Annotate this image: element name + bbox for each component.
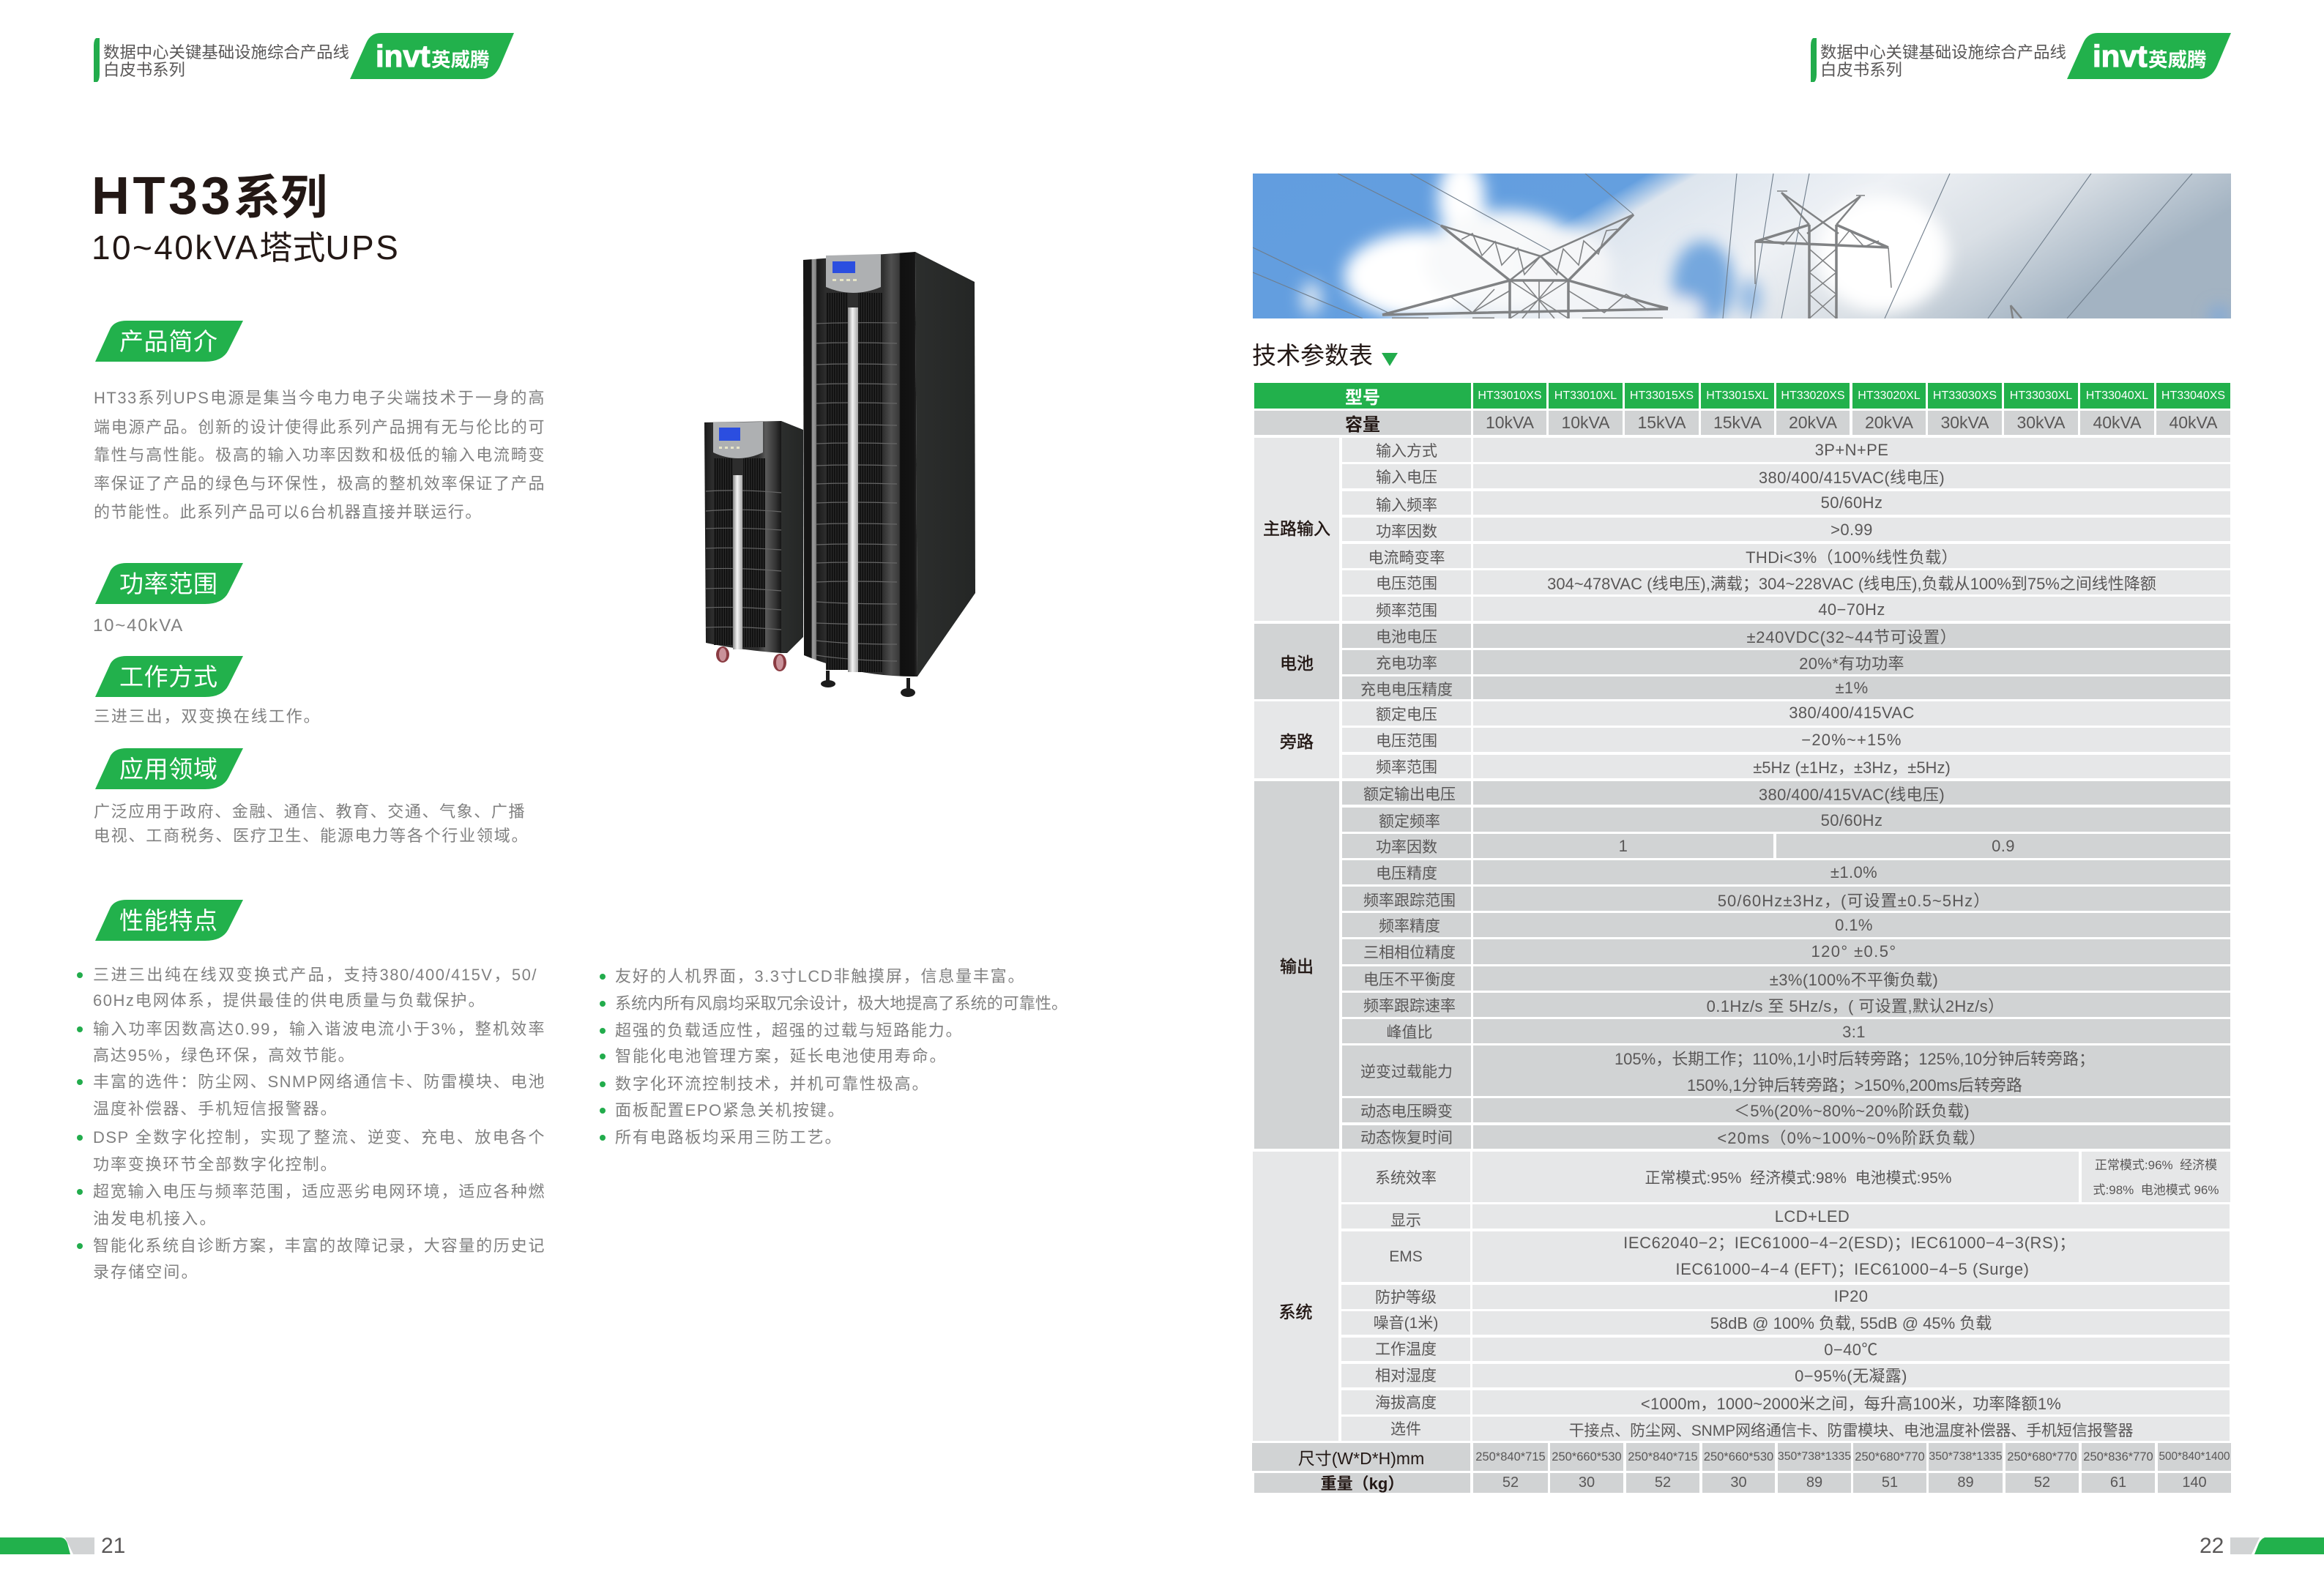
feature item: 数字化环流控制技术，并机可靠性极高。 xyxy=(615,1075,929,1093)
table row: weight: 重量（kg） xyxy=(1321,1475,1404,1492)
row: voltage range xyxy=(1342,570,2230,594)
table section: bypass xyxy=(1254,701,2230,778)
row: power factor: 0.9 xyxy=(1992,836,2015,855)
row: altitude: 海拔高度 xyxy=(1375,1394,1437,1412)
table row: model: HT33040XL xyxy=(2086,389,2148,401)
row: input voltage xyxy=(1342,464,2230,488)
row: dynamic voltage transient: ＜5%(20%~80%~20%阶跃负载) xyxy=(1734,1101,1970,1120)
badge: 工作方式: 工作方式 xyxy=(119,663,217,690)
text: application fields: 电视、工商税务、医疗卫生、能源电力等各个行业领域。 xyxy=(94,827,529,845)
badge: 性能特点 xyxy=(95,900,243,941)
row: protection class xyxy=(1341,1285,2230,1309)
row: altitude: <1000m，1000~2000米之间，每升高100米，功率降额1% xyxy=(1641,1394,2061,1413)
row: voltage accuracy: 电压精度 xyxy=(1376,865,1437,881)
row: display xyxy=(1341,1204,2230,1229)
row: charge power xyxy=(1342,650,2230,674)
power lines xyxy=(1253,174,2192,318)
table row: capacity: 40kVA xyxy=(2093,413,2142,432)
feature item: 超强的负载适应性，超强的过载与短路能力。 xyxy=(615,1021,963,1040)
table row: dimensions: 250*660*530 xyxy=(1704,1450,1773,1463)
row: rated voltage: 380/400/415VAC xyxy=(1789,703,1915,722)
row: voltage accuracy xyxy=(1342,860,2230,884)
table row: model: HT33020XL xyxy=(1858,389,1921,401)
row: frequency range: 频率范围 xyxy=(1376,759,1437,776)
logo: invt: invt xyxy=(376,39,431,73)
table row: weight: 52 xyxy=(1655,1475,1671,1491)
feature item: 丰富的选件：防尘网、SNMP网络通信卡、防雷模块、电池 xyxy=(93,1073,545,1091)
row: voltage unbalance: ±3%(100%不平衡负载) xyxy=(1770,971,1938,988)
badge: 功率范围 xyxy=(95,563,243,604)
table row: dimensions xyxy=(1252,1443,2231,1471)
badge: 性能特点: 性能特点 xyxy=(119,907,217,934)
row: noise: 58dB @ 100% 负载, 55dB @ 45% 负载 xyxy=(1710,1314,1992,1332)
row: EMS: EMS xyxy=(1389,1248,1423,1265)
table row: dimensions: 350*738*1335 xyxy=(1778,1450,1851,1463)
table row: weight: 52 xyxy=(1502,1475,1519,1491)
row: EMS xyxy=(1341,1231,2230,1282)
row: voltage unbalance xyxy=(1342,966,2230,991)
feature item: 面板配置EPO紧急关机按键。 xyxy=(615,1101,845,1119)
table row: capacity: 10kVA xyxy=(1561,413,1610,432)
row: battery voltage: ±240VDC(32~44节可设置） xyxy=(1747,628,1956,646)
row: options: 干接点、防尘网、SNMP网络通信卡、防雷模块、电池温度补偿器、手机短信报警器 xyxy=(1569,1422,2133,1439)
text block: product intro: HT33系列UPS电源是集当今电力电子尖端技术于一身的高 xyxy=(94,389,545,407)
row: current distortion: 电流畸变率 xyxy=(1368,549,1445,567)
row: voltage range: 304~478VAC (线电压),满载；304~228VAC (线电压),负载从100%到75%之间线性降额 xyxy=(1547,574,2156,593)
row: inverter overload: 105%，长期工作；110%,1小时后转旁路；125%,10分钟后转旁路； xyxy=(1614,1050,2095,1068)
table row: weight: 61 xyxy=(2110,1475,2126,1491)
feature item: 智能化系统自诊断方案，丰富的故障记录，大容量的历史记 xyxy=(93,1237,545,1255)
row: power factor: 功率因数 xyxy=(1376,839,1437,855)
feature list: left column xyxy=(77,966,545,1281)
row: voltage unbalance: 电压不平衡度 xyxy=(1363,971,1456,988)
row: frequency range: 40−70Hz xyxy=(1818,600,1885,618)
table row: capacity: 15kVA xyxy=(1713,413,1762,432)
table row: weight: 52 xyxy=(2034,1475,2050,1491)
header text: 白皮书系列 xyxy=(1820,61,1902,79)
tower left xyxy=(1382,215,1668,318)
table row: capacity: 15kVA xyxy=(1637,413,1686,432)
row: inverter overload xyxy=(1342,1045,2230,1096)
header text xyxy=(103,43,349,79)
row: dynamic voltage transient: 动态电压瞬变 xyxy=(1360,1103,1453,1120)
table section: system xyxy=(1253,1152,2230,1441)
heading: technical parameters: 技术参数表 xyxy=(1252,342,1373,369)
row: frequency tracking range: 频率跟踪范围 xyxy=(1363,892,1456,909)
row: relative humidity: 相对湿度 xyxy=(1375,1368,1437,1384)
feature item: 输入功率因数高达0.99，输入谐波电流小于3%，整机效率 xyxy=(93,1020,545,1038)
row: current distortion: THDi<3%（100%线性负载） xyxy=(1746,548,1958,567)
row: current distortion xyxy=(1342,544,2230,568)
table row: dimensions: 250*660*530 xyxy=(1552,1450,1622,1463)
row: input voltage: 输入电压 xyxy=(1376,469,1437,486)
text: application fields: 广泛应用于政府、金融、通信、教育、交通、气象、广播 xyxy=(94,802,526,821)
row: crest ratio: 峰值比 xyxy=(1387,1024,1432,1041)
row: EMS: IEC61000−4−4 (EFT)；IEC61000−4−5 (Surge) xyxy=(1675,1260,2030,1278)
row: frequency range: 频率范围 xyxy=(1376,602,1437,619)
page header left xyxy=(94,33,514,82)
logo: invt: invt xyxy=(2093,39,2148,73)
table row: weight xyxy=(1252,1473,2231,1493)
row: working temperature: 0−40℃ xyxy=(1824,1341,1878,1359)
feature list: right column xyxy=(600,967,1068,1147)
row: voltage range xyxy=(1342,728,2230,752)
text block: product intro: 靠性与高性能。极高的输入功率因数和极低的输入电流畸变 xyxy=(94,446,545,464)
row: power factor: 1 xyxy=(1619,836,1628,855)
row: noise xyxy=(1341,1311,2230,1335)
feature item: 录存储空间。 xyxy=(93,1263,198,1281)
logo: invt: 英威腾 xyxy=(431,49,489,71)
footer right: page 22: 22 xyxy=(2200,1534,2224,1558)
table row: weight: 89 xyxy=(1806,1475,1822,1491)
wheels xyxy=(716,646,786,671)
icon: green down triangle xyxy=(1382,353,1398,366)
row: system efficiency: 式:98% 电池模式 96% xyxy=(2093,1183,2219,1197)
feature item: 高达95%，绿色环保，高效节能。 xyxy=(93,1046,355,1065)
table row: dimensions: 250*840*715 xyxy=(1628,1450,1698,1463)
row: input voltage: 380/400/415VAC(线电压) xyxy=(1759,469,1945,486)
table section: battery xyxy=(1254,624,2230,699)
table section: main input: 主路输入 xyxy=(1263,518,1330,537)
table row: model: HT33015XS xyxy=(1630,389,1694,401)
row: dynamic voltage transient xyxy=(1342,1098,2230,1122)
row: input mode: 输入方式 xyxy=(1376,442,1437,460)
row: charge power: 充电功率 xyxy=(1376,655,1437,672)
table row: dimensions: 250*840*715 xyxy=(1475,1450,1546,1463)
table row: capacity: 10kVA xyxy=(1486,413,1534,432)
row: rated frequency xyxy=(1342,808,2230,832)
row: frequency tracking range xyxy=(1342,887,2230,911)
feature item xyxy=(77,1020,545,1065)
row: charge voltage accuracy xyxy=(1342,676,2230,699)
large cabinet xyxy=(803,252,975,697)
table row: model: HT33015XL xyxy=(1706,389,1769,401)
table row: capacity: 30kVA xyxy=(2016,413,2066,432)
table row: weight: 89 xyxy=(1957,1475,1974,1491)
row: working temperature xyxy=(1341,1338,2230,1361)
footer left: page 21: 21 xyxy=(101,1534,125,1558)
row: display: 显示 xyxy=(1390,1212,1421,1229)
feature item: 油发电机接入。 xyxy=(93,1209,217,1228)
row: power factor: >0.99 xyxy=(1830,521,1873,539)
row: rated output voltage: 380/400/415VAC(线电压) xyxy=(1759,786,1945,804)
badge: 应用领域: 应用领域 xyxy=(119,756,217,783)
table row: dimensions: 350*738*1335 xyxy=(1929,1450,2003,1463)
text block: product intro: 端电源产品。创新的设计使得此系列产品拥有无与伦比的可 xyxy=(94,418,545,436)
small cabinet xyxy=(704,421,803,671)
row: power factor xyxy=(1342,518,2230,541)
badge: 应用领域 xyxy=(95,748,243,789)
row: input frequency: 50/60Hz xyxy=(1821,493,1882,512)
row: rated voltage xyxy=(1342,701,2230,726)
feature item: 智能化电池管理方案，延长电池使用寿命。 xyxy=(615,1047,947,1065)
row: options: 选件 xyxy=(1390,1420,1421,1438)
feet xyxy=(821,671,915,697)
row: battery voltage: 电池电压 xyxy=(1376,628,1437,646)
row: system efficiency xyxy=(1341,1152,2230,1202)
row: noise: 噪音(1米) xyxy=(1374,1315,1438,1332)
logo: invt xyxy=(2067,33,2231,79)
logo: invt: 英威腾 xyxy=(2148,49,2207,71)
table row: model: HT33040XS xyxy=(2161,389,2225,401)
tower middle xyxy=(1755,191,1891,318)
feature item: 60Hz电网体系，提供最佳的供电质量与负载保护。 xyxy=(93,991,485,1010)
table row: dimensions: 250*836*770 xyxy=(2083,1450,2153,1463)
feature item: 友好的人机界面，3.3寸LCD非触摸屏，信息量丰富。 xyxy=(615,967,1025,985)
row: EMS: IEC62040−2；IEC61000−4−2(ESD)；IEC61000−4−3(RS)； xyxy=(1623,1234,2076,1252)
table row: model xyxy=(1254,383,2230,409)
text block: product intro: 率保证了产品的绿色与环保性，极高的整机效率保证了产品 xyxy=(94,474,545,493)
row: frequency range xyxy=(1342,597,2230,621)
table row: capacity: 40kVA xyxy=(2169,413,2218,432)
row: relative humidity: 0−95%(无凝露) xyxy=(1795,1367,1907,1385)
header text: 数据中心关键基础设施综合产品线 xyxy=(1820,43,2066,61)
row: power factor xyxy=(1342,834,2230,858)
row: frequency range: ±5Hz (±1Hz，±3Hz，±5Hz) xyxy=(1753,758,1951,777)
badge: 产品简介: 产品简介 xyxy=(119,328,217,355)
row: crest ratio: 3:1 xyxy=(1842,1022,1866,1041)
row: rated voltage: 额定电压 xyxy=(1376,706,1437,723)
header text: 数据中心关键基础设施综合产品线 xyxy=(103,43,349,61)
row: options xyxy=(1341,1417,2230,1441)
text: power range: 10~40kVA xyxy=(93,616,184,635)
row: three phase accuracy xyxy=(1342,939,2230,964)
feature item xyxy=(77,1073,545,1118)
subtitle: 10~40kVA塔式UPS xyxy=(92,228,400,266)
table row: model: HT33020XS xyxy=(1781,389,1845,401)
row: rated output voltage xyxy=(1342,781,2230,805)
row: dynamic recovery time xyxy=(1342,1125,2230,1149)
table row: weight: 51 xyxy=(1882,1475,1898,1491)
row: protection class: 防护等级 xyxy=(1375,1289,1437,1306)
row: frequency accuracy: 频率精度 xyxy=(1379,918,1440,934)
row: input frequency: 输入频率 xyxy=(1376,497,1437,514)
row: relative humidity xyxy=(1341,1364,2230,1387)
row: frequency tracking rate xyxy=(1342,993,2230,1017)
feature item: 系统内所有风扇均采取冗余设计，极大地提高了系统的可靠性。 xyxy=(615,994,1068,1013)
table row: dimensions: 250*680*770 xyxy=(2007,1450,2077,1463)
logo: invt xyxy=(350,33,514,79)
green accent bar xyxy=(94,38,100,82)
header text xyxy=(1820,43,2066,79)
row: system efficiency: 正常模式:95% 经济模式:98% 电池模式:95% xyxy=(1645,1170,1951,1186)
feature item xyxy=(77,966,537,1010)
table row: dimensions: 尺寸(W*D*H)mm xyxy=(1298,1449,1424,1468)
row: rated frequency: 额定频率 xyxy=(1379,813,1440,830)
page header right xyxy=(1811,33,2231,82)
table row: capacity: 容量 xyxy=(1345,415,1380,435)
row: voltage range: 电压范围 xyxy=(1376,732,1437,750)
row: frequency tracking rate: 0.1Hz/s 至 5Hz/s，( 可设置,默认2Hz/s） xyxy=(1707,997,2004,1015)
row: system efficiency: 系统效率 xyxy=(1375,1170,1437,1186)
row: power factor: 功率因数 xyxy=(1376,523,1437,540)
feature item xyxy=(77,1237,545,1281)
table section: output: 输出 xyxy=(1280,957,1314,976)
row: battery voltage xyxy=(1342,624,2230,648)
row: inverter overload: 150%,1分钟后转旁路；>150%,200ms后转旁路 xyxy=(1687,1076,2022,1095)
row: three phase accuracy: 三相相位精度 xyxy=(1363,944,1456,961)
text block: product intro: 的节能性。此系列产品可以6台机器直接并联运行。 xyxy=(94,503,483,521)
table row: capacity: 20kVA xyxy=(1865,413,1913,432)
feature item: 所有电路板均采用三防工艺。 xyxy=(615,1128,842,1147)
product image: UPS cabinets xyxy=(704,252,975,697)
row: rated frequency: 50/60Hz xyxy=(1821,811,1882,829)
clouds xyxy=(1301,159,2230,331)
table row: weight: 30 xyxy=(1579,1475,1595,1491)
badge: 功率范围: 功率范围 xyxy=(119,570,217,597)
row: frequency accuracy xyxy=(1342,913,2230,937)
table section: output xyxy=(1254,781,2230,1149)
table section: system: 系统 xyxy=(1278,1302,1312,1321)
row: frequency tracking range: 50/60Hz±3Hz，(可设置±0.5~5Hz） xyxy=(1718,892,1990,909)
footer left: page 21 xyxy=(0,1536,124,1556)
feature item xyxy=(77,1128,545,1174)
row: frequency tracking rate: 频率跟踪速率 xyxy=(1363,997,1456,1015)
table row: model: HT33010XS xyxy=(1478,389,1542,401)
row: charge voltage accuracy: ±1% xyxy=(1835,678,1869,697)
feature item: 超宽输入电压与频率范围，适应恶劣电网环境，适应各种燃 xyxy=(93,1182,545,1201)
text block: product intro xyxy=(94,389,545,521)
table row: model: HT33030XL xyxy=(2010,389,2072,401)
row: voltage range: −20%~+15% xyxy=(1801,731,1902,748)
row: voltage range: 电压范围 xyxy=(1376,575,1437,592)
row: frequency accuracy: 0.1% xyxy=(1835,915,1873,934)
text: working mode: 三进三出，双变换在线工作。 xyxy=(94,707,321,726)
row: charge power: 20%*有功功率 xyxy=(1799,655,1904,672)
row: rated output voltage: 额定输出电压 xyxy=(1363,786,1456,803)
text: application fields xyxy=(94,802,529,845)
row: altitude xyxy=(1341,1390,2230,1414)
feature item: DSP 全数字化控制，实现了整流、逆变、充电、放电各个 xyxy=(93,1128,545,1147)
table section: bypass: 旁路 xyxy=(1280,732,1314,751)
row: display: LCD+LED xyxy=(1775,1207,1850,1226)
row: protection class: IP20 xyxy=(1834,1287,1868,1305)
row: input frequency xyxy=(1342,491,2230,515)
badge: 产品简介 xyxy=(95,321,243,362)
row: inverter overload: 逆变过载能力 xyxy=(1360,1063,1453,1081)
row: input mode xyxy=(1342,438,2230,462)
title: HT33系列 xyxy=(92,167,327,225)
row: system efficiency: 正常模式:96% 经济模 xyxy=(2095,1158,2217,1172)
row: dynamic recovery time: <20ms（0%~100%~0%阶跃负载） xyxy=(1717,1129,1986,1147)
row: three phase accuracy: 120° ±0.5° xyxy=(1811,942,1897,961)
table row: dimensions: 250*680*770 xyxy=(1855,1450,1925,1463)
table row: weight: 30 xyxy=(1730,1475,1747,1491)
header text: 白皮书系列 xyxy=(103,61,185,79)
green accent bar xyxy=(1811,38,1817,82)
table section: battery: 电池 xyxy=(1280,653,1314,672)
feature item: 功率变换环节全部数字化控制。 xyxy=(93,1155,338,1174)
row: charge voltage accuracy: 充电电压精度 xyxy=(1360,681,1453,698)
table row: dimensions: 500*840*1400 xyxy=(2159,1450,2230,1463)
row: input mode: 3P+N+PE xyxy=(1815,441,1888,458)
table row: model: HT33010XL xyxy=(1554,389,1617,401)
row: voltage accuracy: ±1.0% xyxy=(1830,862,1877,881)
table row: model: 型号 xyxy=(1345,388,1380,408)
feature item: 温度补偿器、手机短信报警器。 xyxy=(93,1100,338,1118)
row: crest ratio xyxy=(1342,1019,2230,1043)
feature item: 三进三出纯在线双变换式产品，支持380/400/415V，50/ xyxy=(93,966,537,984)
footer right: page 22 xyxy=(2200,1536,2324,1556)
table row: capacity xyxy=(1254,411,2230,435)
table section: main input xyxy=(1254,438,2230,621)
row: dynamic recovery time: 动态恢复时间 xyxy=(1360,1130,1453,1147)
table row: capacity: 30kVA xyxy=(1940,413,1989,432)
table row: weight: 140 xyxy=(2182,1475,2207,1491)
row: frequency range xyxy=(1342,755,2230,778)
table row: model: HT33030XS xyxy=(1933,389,1997,401)
tower small distant xyxy=(2011,305,2022,318)
feature item xyxy=(77,1182,545,1228)
banner image: transmission towers against sky xyxy=(1253,174,2231,318)
badge: 工作方式 xyxy=(95,656,243,697)
table row: capacity: 20kVA xyxy=(1789,413,1837,432)
row: working temperature: 工作温度 xyxy=(1375,1341,1437,1358)
